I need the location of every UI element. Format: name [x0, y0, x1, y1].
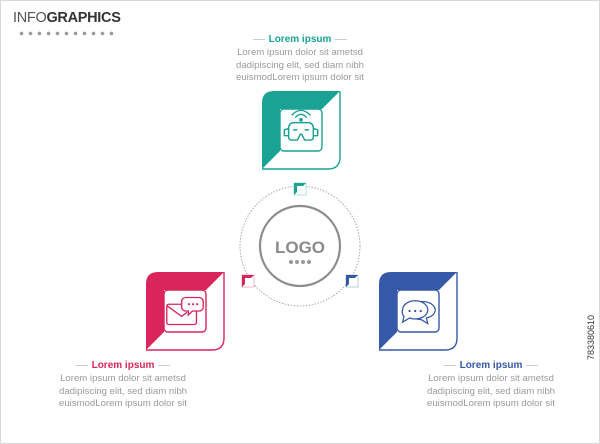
- box: blue with chat icon: [379, 272, 457, 350]
- text: right blue: euismodLorem ipsum dolor sit: [427, 398, 555, 409]
- text: top teal: Lorem ipsum: [269, 34, 331, 45]
- side id text: 783380610: [586, 315, 596, 360]
- text: top teal: euismodLorem ipsum dolor sit: [236, 72, 364, 83]
- connector: blue: [346, 275, 358, 287]
- text: right blue: Lorem ipsum dolor sit ametsd: [428, 373, 554, 384]
- text: top teal: [236, 34, 364, 83]
- text: left pink: Lorem ipsum dolor sit ametsd: [60, 373, 186, 384]
- title dots: [17, 31, 117, 36]
- text: right blue: dadipiscing elit, sed diam nibh: [427, 386, 555, 397]
- connector: teal: [294, 183, 306, 195]
- text: left pink: euismodLorem ipsum dolor sit: [59, 398, 187, 409]
- box: teal with VR icon: [262, 91, 340, 169]
- text: left pink: dadipiscing elit, sed diam nibh: [59, 386, 187, 397]
- text: top teal: Lorem ipsum dolor sit ametsd: [237, 47, 363, 58]
- box: pink with mail icon: [146, 272, 224, 350]
- connector: pink: [242, 275, 254, 287]
- text: left pink: Lorem ipsum: [92, 360, 154, 371]
- title: INFOGRAPHICS: [13, 10, 121, 26]
- logo circle: LOGO: [275, 238, 325, 257]
- logo circle: [260, 206, 340, 286]
- dashed ring: [240, 186, 360, 306]
- text: left pink: [59, 360, 187, 409]
- text: right blue: Lorem ipsum: [460, 360, 522, 371]
- text: right blue: [427, 360, 555, 409]
- text: top teal: dadipiscing elit, sed diam nibh: [236, 60, 364, 71]
